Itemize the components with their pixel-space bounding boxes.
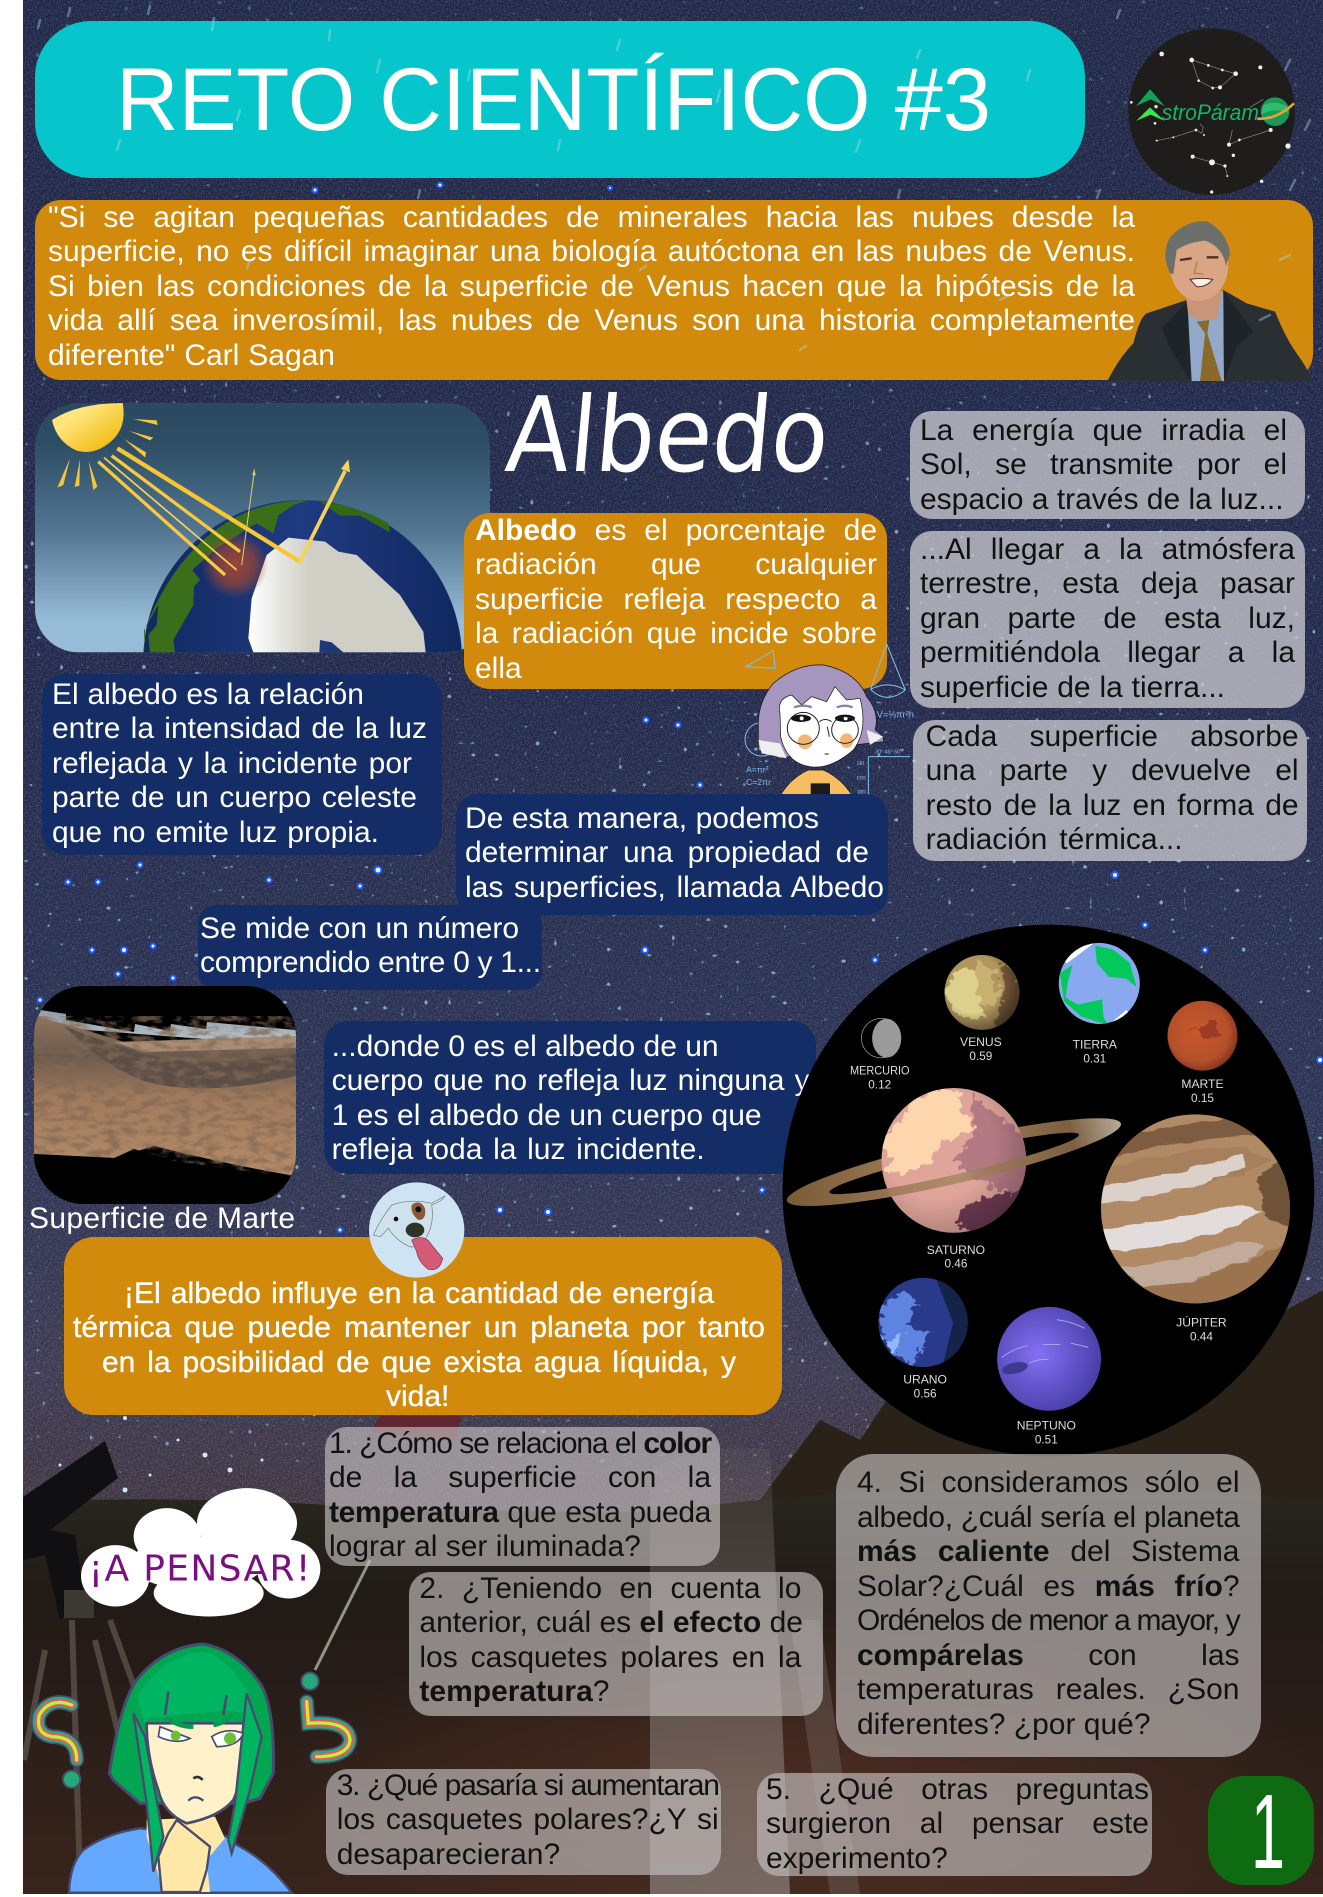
text panel: measured between 0 and 1: comprendido entre 0 y 1... bbox=[200, 946, 541, 979]
question 3: desaparecieran? bbox=[337, 1838, 560, 1870]
planet: Saturn bbox=[782, 1088, 1126, 1271]
question 1 bbox=[325, 1427, 720, 1566]
character: purple-haired scientist with formulas: cos bbox=[857, 775, 866, 781]
question 2: temperatura? bbox=[419, 1675, 609, 1708]
question 3: 3. ¿Qué pasaría si aumentaran bbox=[337, 1768, 719, 1802]
planet: Uranus: 0.56 bbox=[914, 1388, 937, 1401]
quote panel: Carl Sagan: Si bien las condiciones de la superficie de Venus hacen que la hipótesis de la bbox=[48, 270, 1135, 302]
question 1: de la superficie con la bbox=[329, 1461, 711, 1494]
cloud label: ¡A PENSAR! bbox=[88, 1549, 310, 1590]
text panel: energy from the Sun: La energía que irradia el bbox=[920, 414, 1287, 446]
question 4: albedo, ¿cuál sería el planeta bbox=[857, 1501, 1240, 1534]
definition panel: albedo bbox=[464, 513, 887, 689]
text panel: albedo relation: entre la intensidad de la luz bbox=[52, 712, 427, 745]
text panel: measured between 0 and 1 bbox=[198, 905, 542, 990]
chart: planets of the Solar System with albedo values bbox=[782, 924, 1314, 1456]
character: purple-haired scientist with formulas: 30° 45° 60° bbox=[875, 749, 902, 755]
question 1: 1. ¿Cómo se relaciona el color bbox=[329, 1426, 711, 1460]
planet: Jupiter: 0.44 bbox=[1190, 1330, 1213, 1343]
question 4: más caliente del Sistema bbox=[857, 1535, 1240, 1568]
text panel: albedo relation bbox=[42, 674, 442, 855]
text panel: meaning of 0 and 1: ...donde 0 es el albedo de un bbox=[332, 1030, 719, 1062]
question 2: los casquetes polares en la bbox=[419, 1640, 801, 1674]
illustration: sunlight reflected by the Earth bbox=[35, 403, 490, 652]
definition panel: albedo: Albedo es el porcentaje de bbox=[475, 514, 877, 546]
definition panel: albedo: radiación que cualquier bbox=[475, 548, 877, 581]
text panel: measured between 0 and 1: Se mide con un número bbox=[200, 912, 519, 944]
planet: Uranus: URANO bbox=[903, 1373, 947, 1387]
logo: AstroPáram constellation badge bbox=[1128, 28, 1295, 195]
planet: Neptune: NEPTUNO bbox=[1017, 1418, 1076, 1432]
question 4: compárelas con las bbox=[857, 1639, 1240, 1672]
planet: Mars: MARTE bbox=[1181, 1077, 1224, 1091]
text panel: meaning of 0 and 1: cuerpo que no refleja luz ninguna y bbox=[332, 1064, 810, 1097]
planet: Earth bbox=[1057, 942, 1140, 1065]
page number badge bbox=[1208, 1776, 1314, 1885]
text panel: thermal radiation: resto de la luz en forma de bbox=[926, 788, 1299, 822]
character: purple-haired scientist with formulas: A=πr² bbox=[746, 765, 769, 775]
definition panel: albedo: superficie refleja respecto a bbox=[475, 582, 877, 616]
quote panel: Carl Sagan: "Si se agitan pequeñas cantidades de minerales hacia las nubes desde la bbox=[48, 200, 1135, 234]
question 4: 4. Si consideramos sólo el bbox=[857, 1466, 1240, 1499]
character: purple-haired scientist with formulas: C=2πr bbox=[746, 777, 771, 787]
text panel: energy from the Sun: Sol, se transmite por el bbox=[920, 448, 1287, 481]
planet: Jupiter bbox=[1101, 1114, 1290, 1340]
title banner bbox=[35, 21, 1085, 178]
quote panel: Carl Sagan: diferente" Carl Sagan bbox=[48, 338, 335, 372]
text panel: thermal radiation: Cada superficie absorbe bbox=[926, 720, 1299, 752]
planet: Neptune: 0.51 bbox=[1035, 1433, 1058, 1446]
text panel: energy from the Sun: espacio a través de la luz... bbox=[920, 482, 1284, 516]
callout: albedo and liquid water bbox=[64, 1237, 782, 1415]
planet: Earth: TIERRA bbox=[1073, 1038, 1118, 1052]
text panel: reaching the atmosphere: superficie de la tierra... bbox=[920, 670, 1225, 704]
text panel: thermal radiation: radiación térmica... bbox=[926, 823, 1183, 856]
planet: Saturn: SATURNO bbox=[927, 1243, 985, 1257]
text panel: albedo relation: parte de un cuerpo celeste bbox=[52, 781, 417, 814]
question 2 bbox=[409, 1572, 823, 1716]
question 1: temperatura que esta pueda bbox=[329, 1496, 711, 1528]
photo: Mars surface bbox=[34, 986, 296, 1204]
question 5: surgieron al pensar este bbox=[766, 1807, 1149, 1840]
planet: Mars bbox=[1167, 1001, 1237, 1105]
thought cloud: ¡A PENSAR! bbox=[81, 1488, 320, 1616]
question 4 bbox=[836, 1454, 1261, 1757]
icon: closing question mark bbox=[38, 1702, 77, 1760]
text panel: surface property bbox=[456, 794, 888, 915]
question 4: Ordénelos de menor a mayor, y bbox=[857, 1604, 1240, 1637]
character: purple-haired scientist with formulas: sin bbox=[857, 761, 864, 767]
question 2: 2. ¿Teniendo en cuenta lo bbox=[419, 1572, 801, 1604]
question 3: los casquetes polares?¿Y si bbox=[337, 1803, 719, 1836]
text panel: meaning of 0 and 1 bbox=[324, 1021, 816, 1174]
text panel: surface property: determinar una propiedad de bbox=[465, 836, 869, 869]
text panel: reaching the atmosphere: ...Al llegar a la atmósfera bbox=[920, 532, 1295, 566]
text panel: reaching the atmosphere: permitiéndola llegar a la bbox=[920, 636, 1295, 669]
planet: Saturn: 0.46 bbox=[944, 1258, 968, 1271]
question 2: anterior, cuál es el efecto de bbox=[419, 1606, 803, 1639]
planet: Venus bbox=[944, 955, 1020, 1060]
quote panel: Carl Sagan: vida allí sea inverosímil, las nubes de Venus son una historia completamente bbox=[48, 304, 1135, 337]
callout: albedo and liquid water: térmica que puede mantener un planeta por tanto bbox=[73, 1311, 765, 1344]
title text: RETO CIENTÍFICO #3 bbox=[116, 49, 991, 149]
character: green-haired girl thinking with question marks bbox=[31, 1642, 358, 1894]
planet: Mercury: MERCURIO bbox=[850, 1064, 910, 1078]
definition panel: albedo: ella bbox=[475, 652, 522, 684]
character: purple-haired scientist with formulas: V=⅓πr²h bbox=[877, 709, 914, 719]
planet: Mercury: 0.12 bbox=[868, 1079, 891, 1092]
text panel: surface property: las superficies, llamada Albedo bbox=[465, 870, 884, 904]
text panel: reaching the atmosphere: gran parte de esta luz, bbox=[920, 602, 1295, 634]
text panel: reaching the atmosphere bbox=[910, 531, 1305, 708]
text panel: meaning of 0 and 1: 1 es el albedo de un cuerpo que bbox=[332, 1098, 762, 1132]
icon: dog with tongue out bbox=[369, 1182, 464, 1278]
portrait: Carl Sagan bbox=[1108, 221, 1312, 381]
text panel: reaching the atmosphere: terrestre, esta deja pasar bbox=[920, 567, 1295, 600]
question 4: Solar?¿Cuál es más frío? bbox=[857, 1570, 1240, 1603]
quote panel: Carl Sagan: superficie, no es difícil imaginar una biología autóctona en las nubes de Venus. bbox=[48, 235, 1135, 268]
character: purple-haired scientist with formulas: tan bbox=[857, 789, 866, 795]
planet: Mars: 0.15 bbox=[1191, 1092, 1214, 1105]
question 4: diferentes? ¿por qué? bbox=[857, 1708, 1151, 1741]
text panel: albedo relation: El albedo es la relación bbox=[52, 678, 364, 710]
question 4: temperaturas reales. ¿Son bbox=[857, 1673, 1240, 1706]
text panel: surface property: De esta manera, podemos bbox=[465, 802, 819, 834]
text panel: albedo relation: que no emite luz propia. bbox=[52, 816, 379, 848]
planet: Uranus bbox=[878, 1278, 969, 1401]
text panel: energy from the Sun bbox=[910, 411, 1305, 519]
logo: AstroPáram constellation badge: stroPáram bbox=[1162, 100, 1259, 125]
planet: Venus: VENUS bbox=[960, 1035, 1002, 1049]
question 5 bbox=[757, 1773, 1152, 1876]
planet: Venus: 0.59 bbox=[969, 1050, 992, 1063]
question 3 bbox=[326, 1769, 721, 1875]
text panel: thermal radiation bbox=[913, 720, 1307, 861]
planet: Jupiter: JÚPITER bbox=[1176, 1315, 1227, 1330]
callout: albedo and liquid water: ¡El albedo influye en la cantidad de energía bbox=[124, 1276, 714, 1310]
icon: opening question mark bbox=[307, 1702, 350, 1757]
planet: Earth: 0.31 bbox=[1083, 1052, 1106, 1065]
planet: Neptune bbox=[997, 1307, 1101, 1446]
callout: albedo and liquid water: en la posibilidad de que exista agua líquida, y bbox=[102, 1346, 736, 1378]
quote panel: Carl Sagan bbox=[35, 200, 1313, 380]
planet: Mercury bbox=[850, 1018, 910, 1092]
character: purple-haired scientist with formulas bbox=[744, 642, 914, 795]
text panel: meaning of 0 and 1: refleja toda la luz incidente. bbox=[332, 1133, 705, 1166]
caption: Superficie de Marte: Superficie de Marte bbox=[29, 1202, 295, 1235]
question 5: experimento? bbox=[766, 1842, 948, 1874]
text panel: albedo relation: reflejada y la incidente por bbox=[52, 746, 412, 780]
definition panel: albedo: la radiación que incide sobre bbox=[475, 617, 877, 650]
callout: albedo and liquid water: vida! bbox=[386, 1380, 449, 1413]
question 5: 5. ¿Qué otras preguntas bbox=[766, 1772, 1149, 1806]
decorative star streaks over title and quote bbox=[36, 4, 1312, 352]
text panel: thermal radiation: una parte y devuelve el bbox=[926, 754, 1299, 787]
question 1: lograr al ser iluminada? bbox=[329, 1530, 641, 1563]
